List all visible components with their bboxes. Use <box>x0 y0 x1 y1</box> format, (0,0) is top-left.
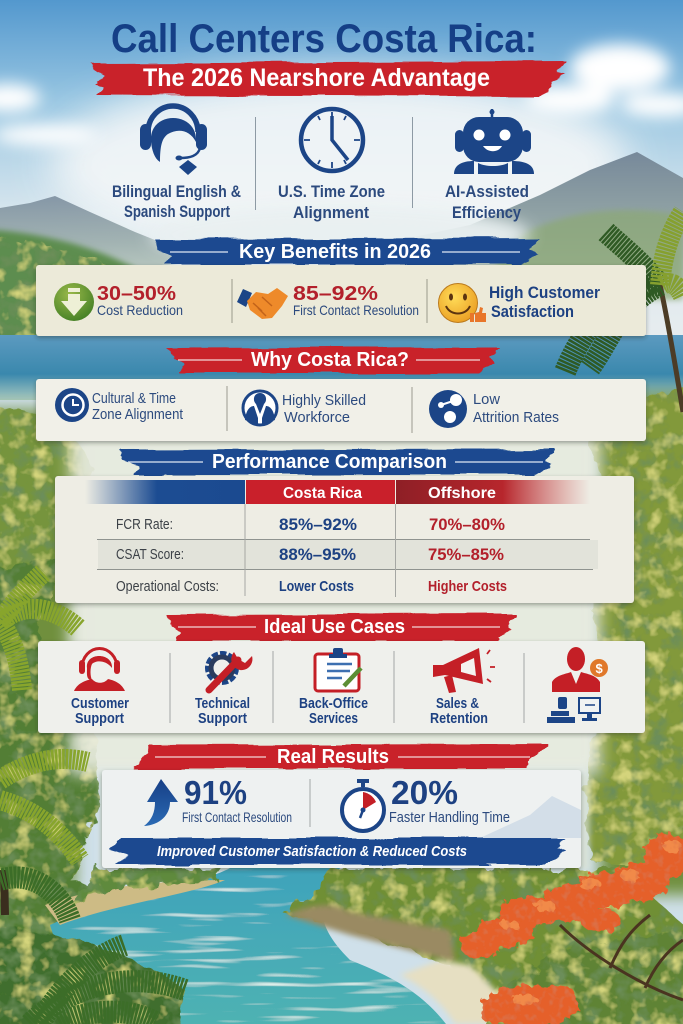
icon: clock <box>301 109 363 171</box>
use case: customer support: Customer <box>71 695 129 712</box>
subtitle banner: The 2026 Nearshore Advantage <box>143 64 490 92</box>
use case: back-office: Services <box>309 710 358 727</box>
reason: low attrition: Low <box>473 391 500 408</box>
lower left foliage <box>0 925 185 1024</box>
row: operational costs: Operational Costs: <box>116 578 219 595</box>
text: time zone: U.S. Time Zone <box>278 182 385 201</box>
banner: Why Costa Rica <box>166 347 500 373</box>
use case: technical support: Support <box>198 710 247 727</box>
reason: skilled workforce: Highly Skilled <box>282 392 366 409</box>
row: operational costs: Higher Costs <box>428 578 507 595</box>
stat: satisfaction: Satisfaction <box>491 302 574 321</box>
icon: up arrow <box>144 779 178 826</box>
reason: skilled workforce: Workforce <box>284 409 350 426</box>
result: 91 percent: 91% <box>184 774 247 811</box>
row: CSAT score <box>116 545 504 564</box>
feature: AI <box>445 109 534 222</box>
icon: handshake <box>237 288 288 319</box>
panel: ideal use cases <box>38 641 645 733</box>
table header: Offshore <box>428 485 496 502</box>
text: bilingual: Spanish Support <box>124 202 230 221</box>
reason: cultural alignment: Zone Alignment <box>92 407 183 423</box>
banner: Real Results: Real Results <box>277 746 389 768</box>
icon: down arrow <box>54 283 94 321</box>
reason: cultural alignment: Cultural & Time <box>92 391 176 407</box>
table header: Costa Rica <box>283 485 362 502</box>
left jungle <box>0 405 95 590</box>
banner: Real Results <box>133 744 548 769</box>
pale center wash <box>70 430 600 775</box>
stat: FCR <box>293 283 419 318</box>
row: FCR rate <box>116 515 505 534</box>
flowering tree <box>460 834 683 1024</box>
icon: gear and wrench <box>208 652 252 690</box>
use case: back-office <box>299 648 368 727</box>
icon: agent <box>74 648 125 691</box>
icon: network <box>429 390 467 428</box>
icon: smiley with thumb <box>438 284 486 322</box>
result: 20 percent: Faster Handling Time <box>389 810 510 826</box>
result: 20 percent: 20% <box>391 774 458 811</box>
icon: time circle <box>55 388 89 422</box>
panel: why Costa Rica <box>36 379 646 441</box>
row: CSAT score: CSAT Score: <box>116 546 184 563</box>
title: Call Centers Costa Rica: <box>111 17 537 61</box>
stat: FCR: First Contact Resolution <box>293 302 419 318</box>
stat: cost reduction <box>97 283 183 318</box>
row: operational costs: Lower Costs <box>279 578 354 595</box>
subtitle banner <box>90 61 567 96</box>
stat: FCR: 85–92% <box>293 283 378 305</box>
result: 91 percent <box>144 774 292 826</box>
use case: sales and retention: Retention <box>430 710 488 727</box>
use case: back-office: Back-Office <box>299 695 368 712</box>
text: bilingual <box>112 182 241 221</box>
text: time zone <box>278 182 385 222</box>
icon: workforce <box>243 391 277 425</box>
use case: sales and retention <box>430 648 495 727</box>
use case: technical support <box>195 652 252 727</box>
results callout bar: Improved Customer Satisfaction & Reduced Costs <box>157 844 467 860</box>
icon: megaphone <box>433 648 495 693</box>
icon: robot <box>454 109 534 174</box>
palms <box>0 212 683 1024</box>
row: FCR rate: 70%–80% <box>429 515 505 534</box>
banner: Why Costa Rica: Why Costa Rica? <box>251 349 409 371</box>
panel: performance comparison table <box>55 476 634 603</box>
banner: Ideal Use Cases: Ideal Use Cases <box>264 616 405 638</box>
right bank <box>285 868 683 1024</box>
table header <box>85 480 590 504</box>
row: operational costs <box>116 578 507 595</box>
text: time zone: Alignment <box>293 203 369 222</box>
row: FCR rate: 85%–92% <box>279 515 357 534</box>
use case: technical support: Technical <box>195 695 250 712</box>
text: bilingual: Bilingual English & <box>112 182 241 201</box>
results callout bar <box>110 838 566 865</box>
use case: customer support <box>71 648 129 727</box>
soft green underlay for jungle <box>0 395 683 895</box>
reason: low attrition <box>429 390 559 428</box>
use case: staffing icon group <box>547 647 608 723</box>
stat: satisfaction: High Customer <box>489 283 600 302</box>
use case: sales and retention: Sales & <box>436 695 479 712</box>
icon: headset agent <box>140 106 207 175</box>
use case: customer support: Support <box>75 710 124 727</box>
panel: key benefits <box>36 265 646 336</box>
branches <box>560 915 683 1000</box>
panel: real results <box>102 770 581 868</box>
banner: Ideal Use Cases <box>166 614 517 641</box>
row: FCR rate: FCR Rate: <box>116 516 173 533</box>
icon: stopwatch <box>342 779 384 831</box>
reason: low attrition: Attrition Rates <box>473 409 559 426</box>
text: AI: Efficiency <box>452 203 521 222</box>
stat: cost reduction: 30–50% <box>97 283 176 305</box>
stat: satisfaction <box>489 283 600 321</box>
river <box>50 868 470 1024</box>
banner: Performance Comparison <box>120 449 555 475</box>
feature: bilingual support <box>112 106 241 221</box>
reason: skilled workforce <box>243 391 366 426</box>
result: 91 percent: First Contact Resolution <box>182 809 292 825</box>
banner: Key Benefits <box>155 238 540 265</box>
result: 20 percent <box>342 774 510 831</box>
icon: business person: $ <box>596 661 604 676</box>
stat: cost reduction: Cost Reduction <box>97 302 183 318</box>
row: CSAT score: 88%–95% <box>279 545 356 564</box>
reason: cultural alignment <box>55 388 183 423</box>
icon: desk and computer <box>547 697 600 723</box>
feature: time zone <box>278 109 385 222</box>
banner: Key Benefits: Key Benefits in 2026 <box>239 241 431 263</box>
icon: clipboard <box>315 648 361 691</box>
text: AI: AI-Assisted <box>445 182 529 201</box>
banner: Performance Comparison: Performance Comparison <box>212 451 447 473</box>
row: CSAT score: 75%–85% <box>428 545 504 564</box>
text: AI <box>445 182 529 222</box>
right jungle <box>585 385 683 880</box>
